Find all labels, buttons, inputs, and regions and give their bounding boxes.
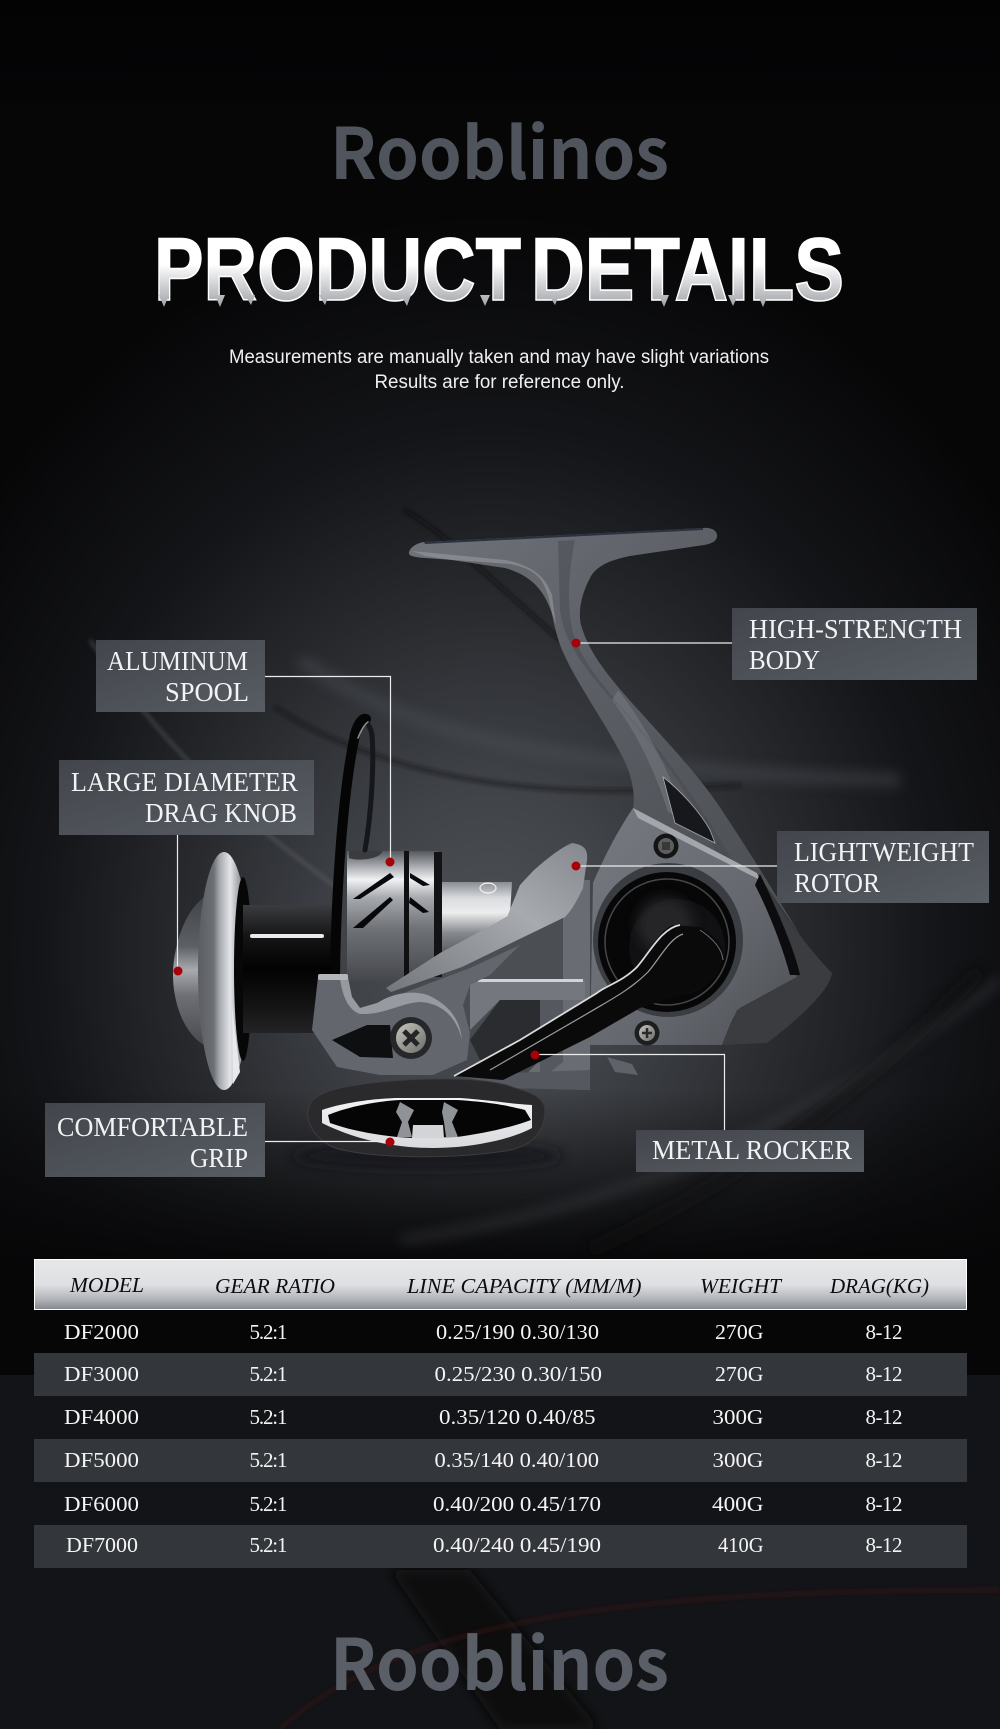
table row DF7000: 5.2:1 [250, 1533, 288, 1557]
table row DF2000: 270G [715, 1320, 764, 1344]
table row DF6000: 0.40/200 0.45/170 [433, 1492, 601, 1516]
table row DF3000: 8-12 [866, 1362, 902, 1386]
title: product details: DETAILS [531, 219, 844, 319]
reel: handle crank arm [454, 925, 723, 1080]
reel: small lever [607, 1057, 638, 1075]
table row DF7000: 8-12 [866, 1533, 902, 1557]
reel: body housing [590, 808, 832, 1045]
callout: large diameter drag knob: LARGE DIAMETER [71, 767, 298, 797]
reel: spool flange [198, 852, 252, 1090]
brand heading top: Rooblinos [330, 98, 669, 200]
table row DF5000: 8-12 [866, 1448, 902, 1472]
table row DF6000: DF6000 [64, 1492, 139, 1516]
callout: comfortable grip: GRIP [190, 1143, 248, 1173]
table row DF6000: 5.2:1 [250, 1492, 288, 1516]
table row DF4000: DF4000 [64, 1405, 139, 1429]
table row DF3000: 270G [715, 1362, 764, 1386]
table row DF5000: 5.2:1 [250, 1448, 288, 1472]
table header: GEAR RATIO [215, 1274, 335, 1298]
reel: bail holder [312, 945, 520, 1075]
reel: grip knob [308, 1079, 545, 1157]
table row DF4000: 300G [712, 1405, 764, 1429]
table header: DRAG(KG) [829, 1274, 929, 1298]
table row DF6000: 400G [712, 1492, 764, 1516]
reel: lower frame [455, 979, 590, 1090]
callout: comfortable grip [45, 1103, 265, 1177]
callout: comfortable grip: COMFORTABLE [57, 1112, 248, 1142]
table header: LINE CAPACITY (MM/M) [406, 1274, 642, 1298]
table row DF6000 [64, 1492, 902, 1516]
spinning reel illustration [173, 528, 832, 1170]
reel: under-arm shadow block [440, 880, 563, 985]
table row DF3000: DF3000 [64, 1362, 139, 1386]
callout: aluminum spool: SPOOL [165, 677, 249, 707]
callout: high-strength body: BODY [749, 645, 820, 675]
reel: bail wire [335, 719, 373, 977]
title: product details [154, 219, 844, 319]
table row DF5000: 300G [712, 1448, 764, 1472]
callout marker dots [174, 638, 580, 1146]
table row DF4000 [64, 1405, 902, 1429]
leader lines [178, 643, 777, 1142]
table row DF4000: 0.35/120 0.40/85 [439, 1405, 596, 1429]
table row DF4000: 5.2:1 [250, 1405, 288, 1429]
table row DF3000 [34, 1353, 967, 1396]
table row DF3000: 0.25/230 0.30/150 [434, 1362, 602, 1386]
table row DF7000: DF7000 [66, 1533, 138, 1557]
subtitle note: Results are for reference only. [374, 372, 624, 393]
reel shadow [292, 1142, 562, 1170]
specification table [34, 1260, 967, 1568]
brand heading bottom: Rooblinos [330, 1609, 669, 1711]
reel: aluminum spool cylinder [347, 851, 512, 981]
table row DF6000: 8-12 [866, 1492, 902, 1516]
table header: MODEL [69, 1273, 144, 1297]
table row DF2000: 0.25/190 0.30/130 [436, 1320, 599, 1344]
callout: high-strength body [732, 608, 977, 680]
table row DF5000: DF5000 [64, 1448, 139, 1472]
callout: lightweight rotor: ROTOR [794, 868, 880, 898]
callout: large diameter drag knob [59, 760, 314, 835]
reel: drag knob dome [173, 890, 220, 1050]
callout: metal rocker [636, 1130, 864, 1172]
reel: rotor cup [513, 880, 590, 1090]
reel: bearing window [593, 863, 743, 1017]
table row DF5000: 0.35/140 0.40/100 [434, 1448, 599, 1472]
title: product details: PRODUCT [154, 219, 521, 319]
callout: aluminum spool [96, 640, 265, 712]
table row DF5000 [34, 1439, 967, 1482]
reel: top screw [654, 834, 678, 858]
table row DF7000: 0.40/240 0.45/190 [433, 1533, 601, 1557]
reel: bottom screw [634, 1020, 660, 1046]
subtitle note [229, 347, 769, 393]
callout: aluminum spool: ALUMINUM [107, 646, 248, 676]
table row DF2000: 5.2:1 [250, 1320, 288, 1344]
callout: lightweight rotor [777, 831, 989, 903]
callout: large diameter drag knob: DRAG KNOB [145, 798, 297, 828]
table row DF2000: DF2000 [64, 1320, 139, 1344]
table row DF2000: 8-12 [866, 1320, 902, 1344]
callout: metal rocker: METAL ROCKER [652, 1135, 852, 1165]
table row DF7000: 410G [718, 1533, 764, 1557]
table row DF2000 [64, 1320, 902, 1344]
callout: lightweight rotor: LIGHTWEIGHT [794, 837, 974, 867]
table row DF4000: 8-12 [866, 1405, 902, 1429]
subtitle note: Measurements are manually taken and may have slight variations [229, 347, 769, 368]
table row DF7000 [34, 1525, 967, 1568]
table row DF3000: 5.2:1 [250, 1362, 288, 1386]
table header: WEIGHT [700, 1274, 782, 1298]
reel: black spool shaft [243, 905, 340, 1033]
reel: stem and foot [409, 528, 800, 935]
callout: high-strength body: HIGH-STRENGTH [749, 614, 962, 644]
reel: rotor upper arm [386, 843, 587, 992]
table header [34, 1260, 966, 1310]
